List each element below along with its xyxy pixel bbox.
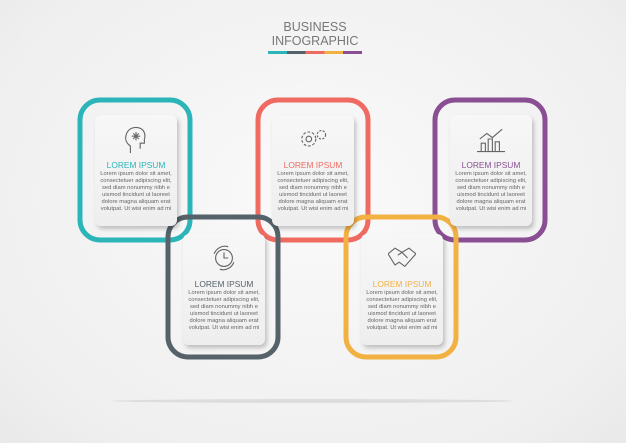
frame: orange <box>346 217 456 357</box>
card 4: LOREM IPSUM <box>195 279 253 289</box>
title: BUSINESS <box>283 20 347 34</box>
card 5 <box>361 234 443 345</box>
frame: red <box>258 100 368 240</box>
frame: grey <box>168 217 278 357</box>
icon: handshake <box>388 248 416 268</box>
card 2: Lorem ipsum dolor sit amet, consectetuer adipiscing elit, sed diam nonummy nibh e uismod tincidunt ut laoreet dolore magna aliquam erat volutpat. Ut wisi enim ad mi <box>277 171 349 212</box>
card 1: Lorem ipsum dolor sit amet, consectetuer adipiscing elit, sed diam nonummy nibh e uismod tincidunt ut laoreet dolore magna aliquam erat volutpat. Ut wisi enim ad mi <box>100 171 172 212</box>
title: INFOGRAPHIC <box>272 34 358 48</box>
card 3: Lorem ipsum dolor sit amet, consectetuer adipiscing elit, sed diam nonummy nibh e uismod tincidunt ut laoreet dolore magna aliquam erat volutpat. Ut wisi enim ad mi <box>455 171 527 212</box>
card 3: LOREM IPSUM <box>462 160 520 170</box>
title underline <box>268 51 362 54</box>
card 1: LOREM IPSUM <box>107 160 165 170</box>
card 2: LOREM IPSUM <box>284 160 342 170</box>
icon: gears <box>301 130 326 146</box>
frame: teal <box>80 100 190 240</box>
icon: head <box>125 126 146 153</box>
card 1 <box>95 115 177 226</box>
card 5: LOREM IPSUM <box>373 279 431 289</box>
card 5: Lorem ipsum dolor sit amet, consectetuer adipiscing elit, sed diam nonummy nibh e uismod tincidunt ut laoreet dolore magna aliquam erat volutpat. Ut wisi enim ad mi <box>366 290 438 331</box>
frame: purple <box>435 100 545 240</box>
card 3 <box>450 115 532 226</box>
card 2 <box>272 115 354 226</box>
card 4 <box>183 234 265 345</box>
icon: chart <box>477 128 505 152</box>
card 4: Lorem ipsum dolor sit amet, consectetuer adipiscing elit, sed diam nonummy nibh e uismod tincidunt ut laoreet dolore magna aliquam erat volutpat. Ut wisi enim ad mi <box>188 290 260 331</box>
floor shadow <box>113 399 513 403</box>
title <box>268 20 362 54</box>
icon: clock <box>214 246 234 270</box>
